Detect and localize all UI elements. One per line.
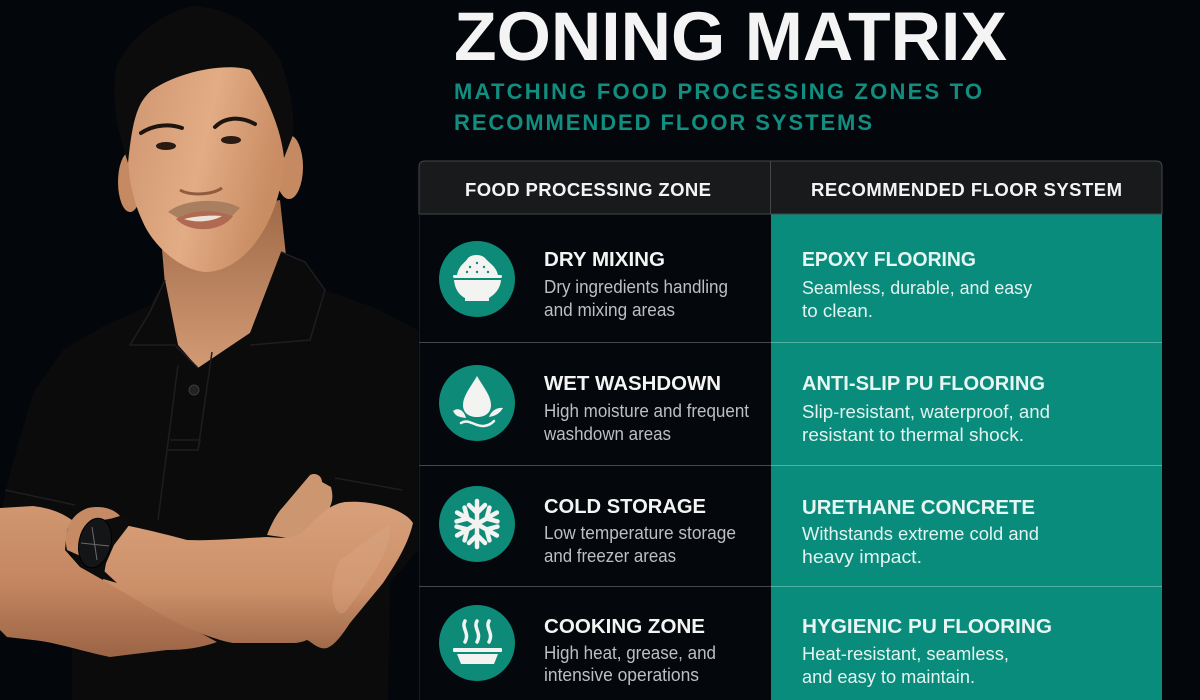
row: cooking zone: HYGIENIC PU FLOORING <box>802 616 1052 638</box>
table body floor column <box>771 214 1162 700</box>
icon: bowl of powder <box>439 241 515 317</box>
row: wet washdown: resistant to thermal shock. <box>802 425 1024 445</box>
title: ZONING MATRIX <box>454 0 1007 75</box>
row: cooking zone: Heat-resistant, seamless, <box>802 644 1009 664</box>
row: cold storage <box>439 486 1039 567</box>
subtitle: RECOMMENDED FLOOR SYSTEMS <box>454 110 872 135</box>
row: dry mixing: Dry ingredients handling <box>544 277 728 297</box>
row: cold storage: and freezer areas <box>544 546 676 566</box>
icon: snowflake <box>439 486 515 562</box>
icon: water drop with splash <box>439 365 515 441</box>
right ear <box>275 135 303 199</box>
polo button <box>189 385 199 395</box>
subtitle <box>454 79 982 135</box>
row: wet washdown: High moisture and frequent <box>544 401 749 421</box>
fingers of tucked hand <box>267 474 332 540</box>
icon: steaming dish <box>439 605 515 681</box>
row: cooking zone <box>439 605 1052 687</box>
table header <box>419 161 1162 214</box>
row: cooking zone: intensive operations <box>544 665 699 685</box>
row: dry mixing: EPOXY FLOORING <box>802 249 976 271</box>
row: cooking zone: COOKING ZONE <box>544 616 705 638</box>
table body zone column <box>419 214 771 700</box>
row: dry mixing <box>439 241 1032 321</box>
eyes <box>156 136 241 150</box>
portrait: man in black polo with crossed arms <box>0 6 418 700</box>
row: cold storage: Low temperature storage <box>544 523 736 543</box>
row: wet washdown: Slip-resistant, waterproof, and <box>802 402 1050 422</box>
row: cold storage: URETHANE CONCRETE <box>802 497 1035 519</box>
row: dry mixing: to clean. <box>802 301 873 321</box>
table header: FOOD PROCESSING ZONE <box>465 179 711 200</box>
wristwatch <box>74 515 133 583</box>
row: wet washdown: ANTI-SLIP PU FLOORING <box>802 373 1045 395</box>
row: wet washdown <box>439 365 1050 445</box>
face <box>128 62 285 272</box>
row: dry mixing: Seamless, durable, and easy <box>802 278 1032 298</box>
hand over wrist <box>66 507 120 558</box>
row: cooking zone: High heat, grease, and <box>544 643 716 663</box>
polo shirt <box>2 252 418 700</box>
shirt collar and placket <box>5 252 402 520</box>
row: dry mixing: and mixing areas <box>544 300 675 320</box>
row: cold storage: heavy impact. <box>802 547 922 567</box>
upper crossed arm <box>103 502 413 648</box>
row: dry mixing: DRY MIXING <box>544 249 665 271</box>
subtitle: MATCHING FOOD PROCESSING ZONES TO <box>454 79 982 104</box>
left ear <box>118 152 142 212</box>
row: wet washdown: washdown areas <box>543 424 671 444</box>
table header: RECOMMENDED FLOOR SYSTEM <box>811 179 1122 200</box>
eyebrows <box>141 119 255 133</box>
forearm highlight <box>332 525 390 613</box>
row: cold storage: Withstands extreme cold and <box>802 524 1039 544</box>
row: cooking zone: and easy to maintain. <box>802 667 975 687</box>
neck <box>160 200 287 368</box>
nose <box>180 188 222 194</box>
stubble <box>168 201 240 218</box>
lower arm <box>0 506 217 657</box>
row: wet washdown: WET WASHDOWN <box>544 373 721 395</box>
mouth <box>176 211 233 229</box>
hair <box>114 6 293 163</box>
zoning table <box>419 161 1162 700</box>
row: cold storage: COLD STORAGE <box>544 496 706 518</box>
